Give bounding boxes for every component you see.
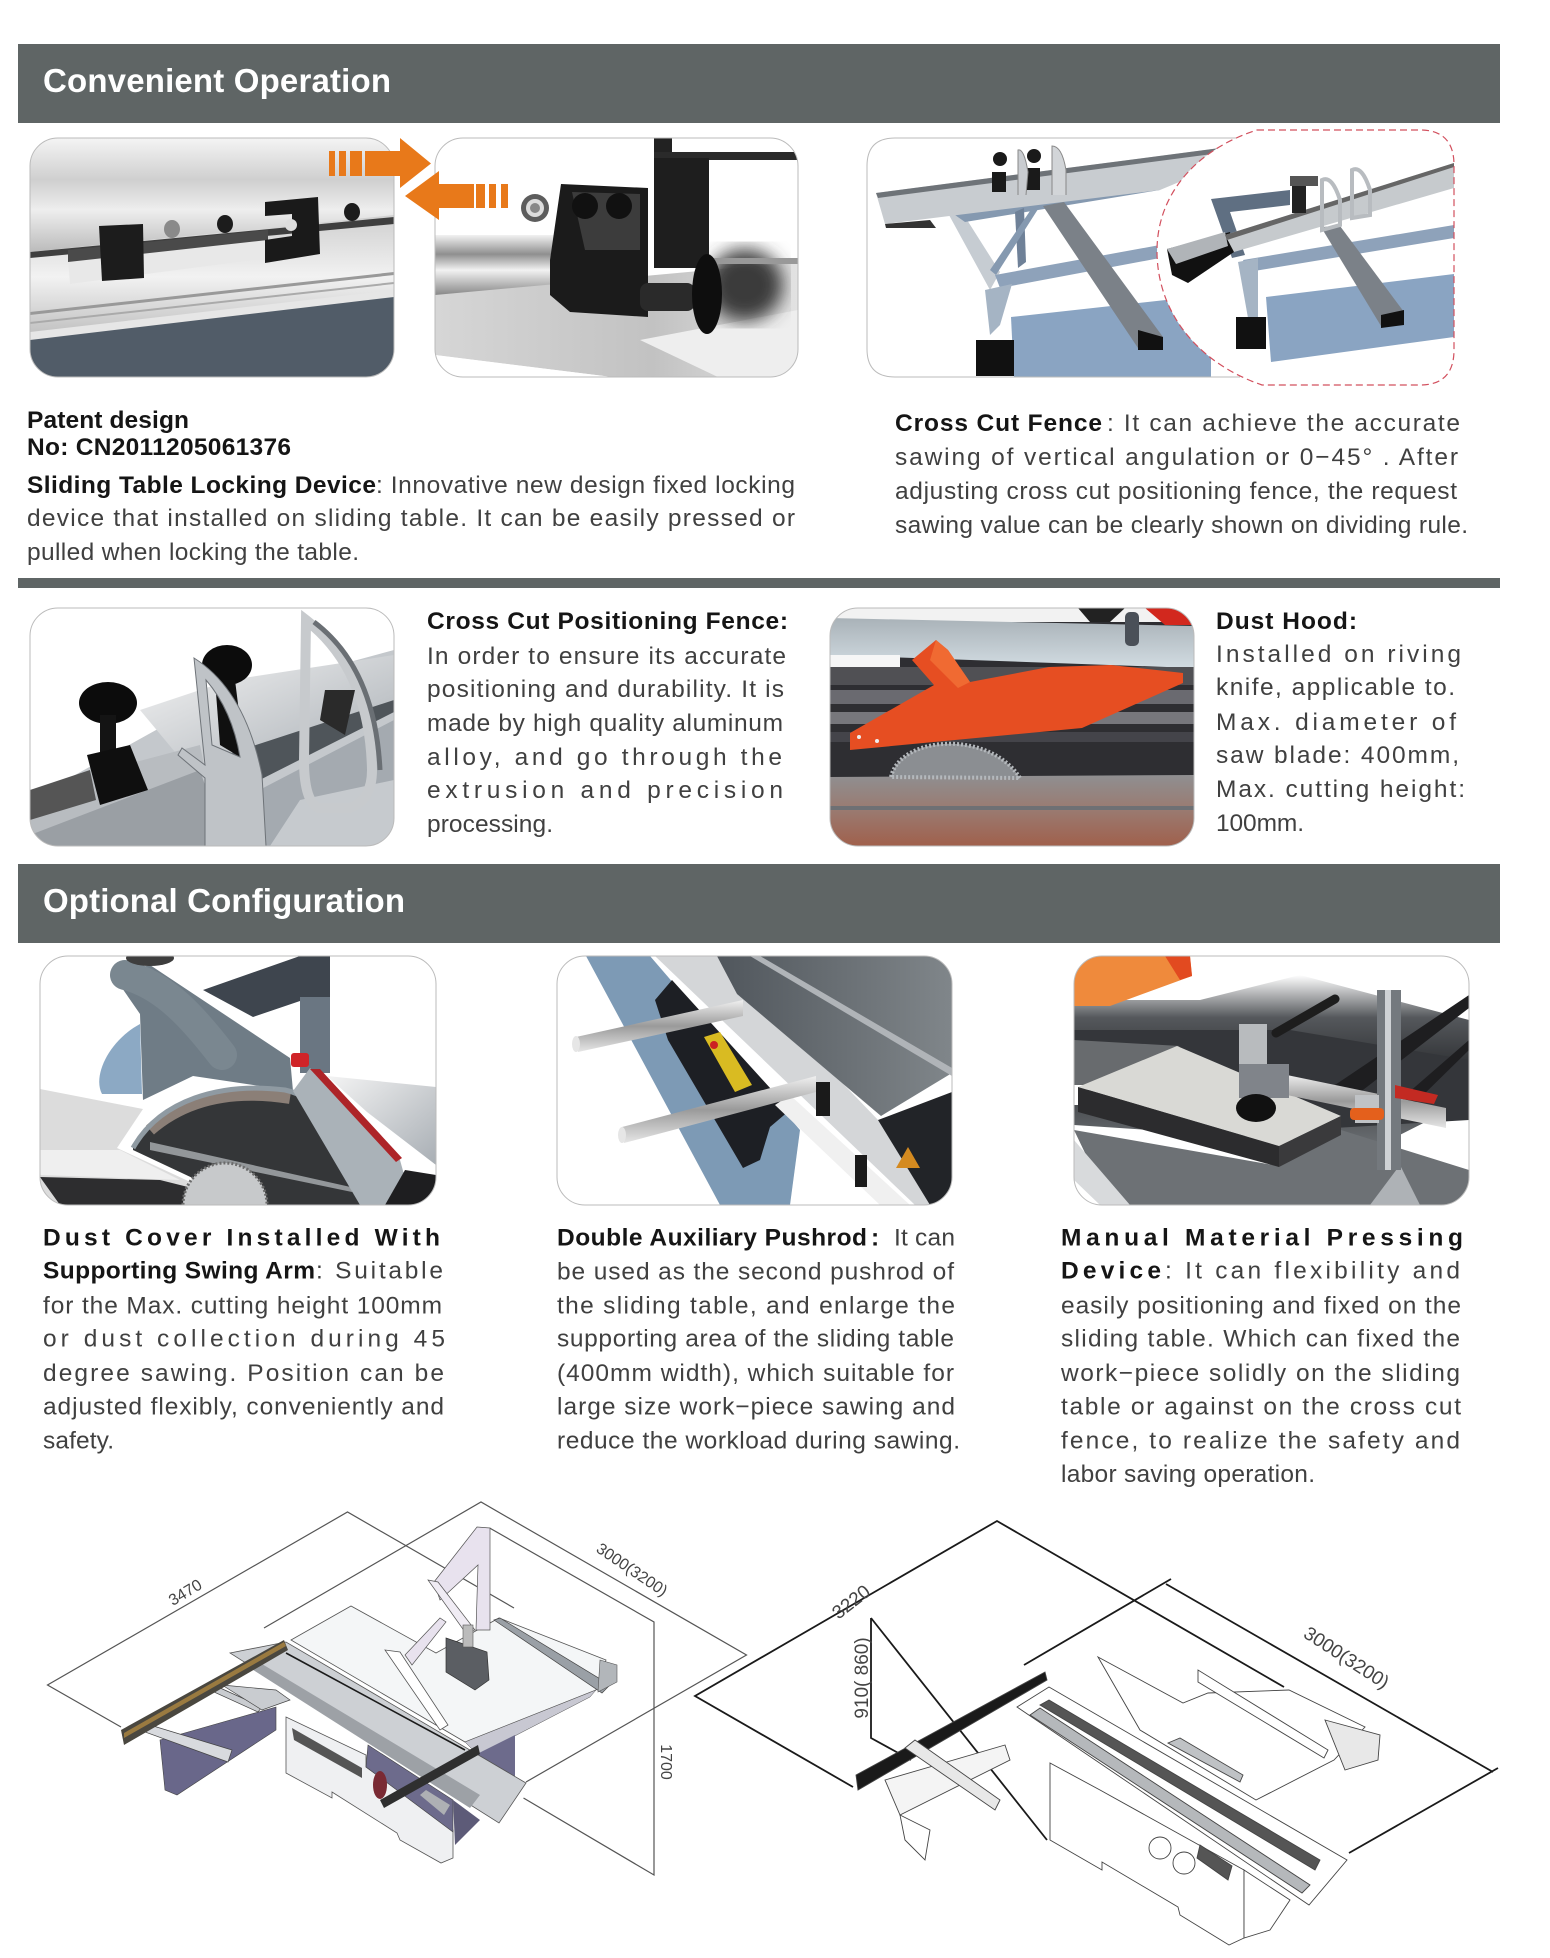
- text: dust cover with supporting swing arm: safety.: [43, 1428, 114, 1454]
- text: sliding table locking device: pulled when locking the table.: [27, 539, 359, 566]
- arrow: push right: [329, 138, 431, 188]
- text: sliding table locking device: : Innovative new design fixed locking: [376, 472, 795, 499]
- inset: rotated fence view: [1157, 130, 1454, 385]
- header band: Convenient Operation: [18, 44, 1500, 123]
- text: double auxiliary pushrod: :: [871, 1224, 879, 1252]
- text: cross cut positioning fence: In order to ensure its accurate: [427, 643, 786, 670]
- text: cross cut positioning fence: [427, 608, 788, 838]
- text: dust cover with supporting swing arm: for the Max. cutting height 100mm: [43, 1292, 442, 1320]
- text: cross cut positioning fence: alloy, and go through the: [427, 744, 782, 771]
- dimension labels: 910( 860): [852, 1637, 873, 1719]
- text: dust hood: Max. cutting height:: [1216, 776, 1465, 803]
- text: cross cut fence: : It can achieve the accurate: [1107, 410, 1460, 437]
- dimension labels: 3000(3200): [1300, 1623, 1392, 1694]
- text: dust cover with supporting swing arm: Supporting Swing Arm: [43, 1258, 315, 1284]
- text: dust hood: knife, applicable to.: [1216, 674, 1455, 701]
- text: sliding table locking device: Sliding Table Locking Device: [27, 472, 376, 499]
- text: manual material pressing device: [1060, 1224, 1463, 1488]
- text: dust hood: 100mm.: [1216, 810, 1304, 837]
- text: dust cover with supporting swing arm: [43, 1224, 445, 1454]
- text: manual material pressing device: sliding table. Which can fixed the: [1061, 1326, 1460, 1352]
- text: dust hood: Max. diameter of: [1216, 709, 1456, 736]
- dimension drawing: colour machine with arm: [48, 1502, 746, 1875]
- photo: cross cut fence with inset: [867, 130, 1454, 385]
- heading: Convenient Operation: Convenient Operation: [43, 62, 391, 99]
- text: manual material pressing device: work−piece solidly on the sliding: [1060, 1360, 1460, 1387]
- text: double auxiliary pushrod: be used as the second pushrod of: [557, 1258, 954, 1286]
- text: dust cover with supporting swing arm: degree sawing. Position can be: [43, 1360, 444, 1387]
- dimension labels: 3000(3200): [593, 1540, 670, 1600]
- text: double auxiliary pushrod: [557, 1224, 960, 1454]
- text: manual material pressing device: Device: [1061, 1258, 1161, 1284]
- heading: Optional Configuration: Optional Configuration: [43, 882, 405, 919]
- dimension labels: [828, 1581, 1392, 1719]
- text: dust hood: Dust Hood:: [1216, 608, 1357, 635]
- text: manual material pressing device: labor saving operation.: [1061, 1461, 1315, 1488]
- text: dust cover with supporting swing arm: Dust Cover Installed With: [43, 1224, 440, 1252]
- text: patent design number: [27, 407, 291, 461]
- header band: Optional Configuration: [18, 864, 1500, 943]
- text: dust cover with supporting swing arm: or dust collection during 45: [43, 1326, 445, 1352]
- machine outline: [856, 1657, 1380, 1945]
- text: dust hood: Installed on riving: [1216, 641, 1461, 668]
- text: patent design number: No: CN2011205061376: [27, 434, 291, 461]
- text: manual material pressing device: : It can flexibility and: [1165, 1258, 1460, 1284]
- dimension labels: [166, 1540, 674, 1780]
- text: cross cut positioning fence: positioning and durability. It is: [427, 676, 784, 703]
- dimension drawing: line art machine: [695, 1521, 1498, 1945]
- text: cross cut fence: sawing value can be clearly shown on dividing rule.: [895, 512, 1468, 539]
- photo: double auxiliary pushrod: [557, 956, 960, 1205]
- photo: dust hood: [830, 608, 1194, 846]
- text: double auxiliary pushrod: It can: [894, 1224, 955, 1252]
- text: cross cut positioning fence: extrusion and precision: [427, 777, 783, 804]
- text: double auxiliary pushrod: the sliding table, and enlarge the: [557, 1292, 955, 1320]
- text: manual material pressing device: fence, to realize the safety and: [1061, 1428, 1460, 1454]
- text: double auxiliary pushrod: supporting area of the sliding table: [557, 1326, 954, 1352]
- text: cross cut positioning fence: processing.: [427, 811, 553, 838]
- text: manual material pressing device: easily positioning and fixed on the: [1061, 1292, 1461, 1320]
- photo: sliding table locking device, open: [435, 138, 798, 378]
- dimension lines: [695, 1521, 1498, 1853]
- text: double auxiliary pushrod: (400mm width), which suitable for: [557, 1360, 954, 1387]
- text: dust hood: [1216, 608, 1465, 837]
- photo: cross cut positioning fence: [30, 608, 394, 846]
- dimension labels: 3470: [166, 1577, 205, 1610]
- text: sliding table locking device: [27, 472, 795, 566]
- text: dust cover with supporting swing arm: adjusted flexibly, conveniently and: [43, 1394, 444, 1420]
- photo: sliding table locking device, closed: [30, 138, 394, 378]
- text: cross cut fence: adjusting cross cut positioning fence, the request: [895, 478, 1457, 505]
- text: cross cut fence: sawing of vertical angulation or 0−45° . After: [895, 444, 1458, 471]
- dimension lines: [48, 1502, 746, 1875]
- dimension labels: 1700: [657, 1744, 674, 1780]
- text: manual material pressing device: Manual Material Pressing: [1061, 1224, 1463, 1252]
- text: double auxiliary pushrod: reduce the workload during sawing.: [557, 1428, 960, 1454]
- text: cross cut fence: [895, 410, 1468, 539]
- text: dust cover with supporting swing arm: : Suitable: [316, 1258, 443, 1284]
- text: sliding table locking device: device that installed on sliding table. It can be easily pressed or: [27, 505, 795, 532]
- text: cross cut positioning fence: made by high quality aluminum: [427, 710, 783, 737]
- divider bar: [18, 578, 1500, 588]
- text: double auxiliary pushrod: Double Auxiliary Pushrod: [557, 1224, 867, 1252]
- arrow: pull left: [405, 171, 508, 220]
- machine: [121, 1527, 617, 1863]
- text: dust hood: saw blade: 400mm,: [1216, 742, 1459, 769]
- text: manual material pressing device: table or against on the cross cut: [1061, 1394, 1461, 1420]
- text: patent design number: Patent design: [27, 407, 189, 434]
- photo: manual material pressing device: [1074, 956, 1469, 1205]
- photo: dust cover with supporting swing arm: [40, 956, 436, 1206]
- dimension labels: 3220: [828, 1581, 875, 1624]
- text: double auxiliary pushrod: large size work−piece sawing and: [557, 1394, 955, 1420]
- text: cross cut positioning fence: Cross Cut Positioning Fence:: [427, 608, 788, 635]
- text: cross cut fence: Cross Cut Fence: [895, 410, 1102, 437]
